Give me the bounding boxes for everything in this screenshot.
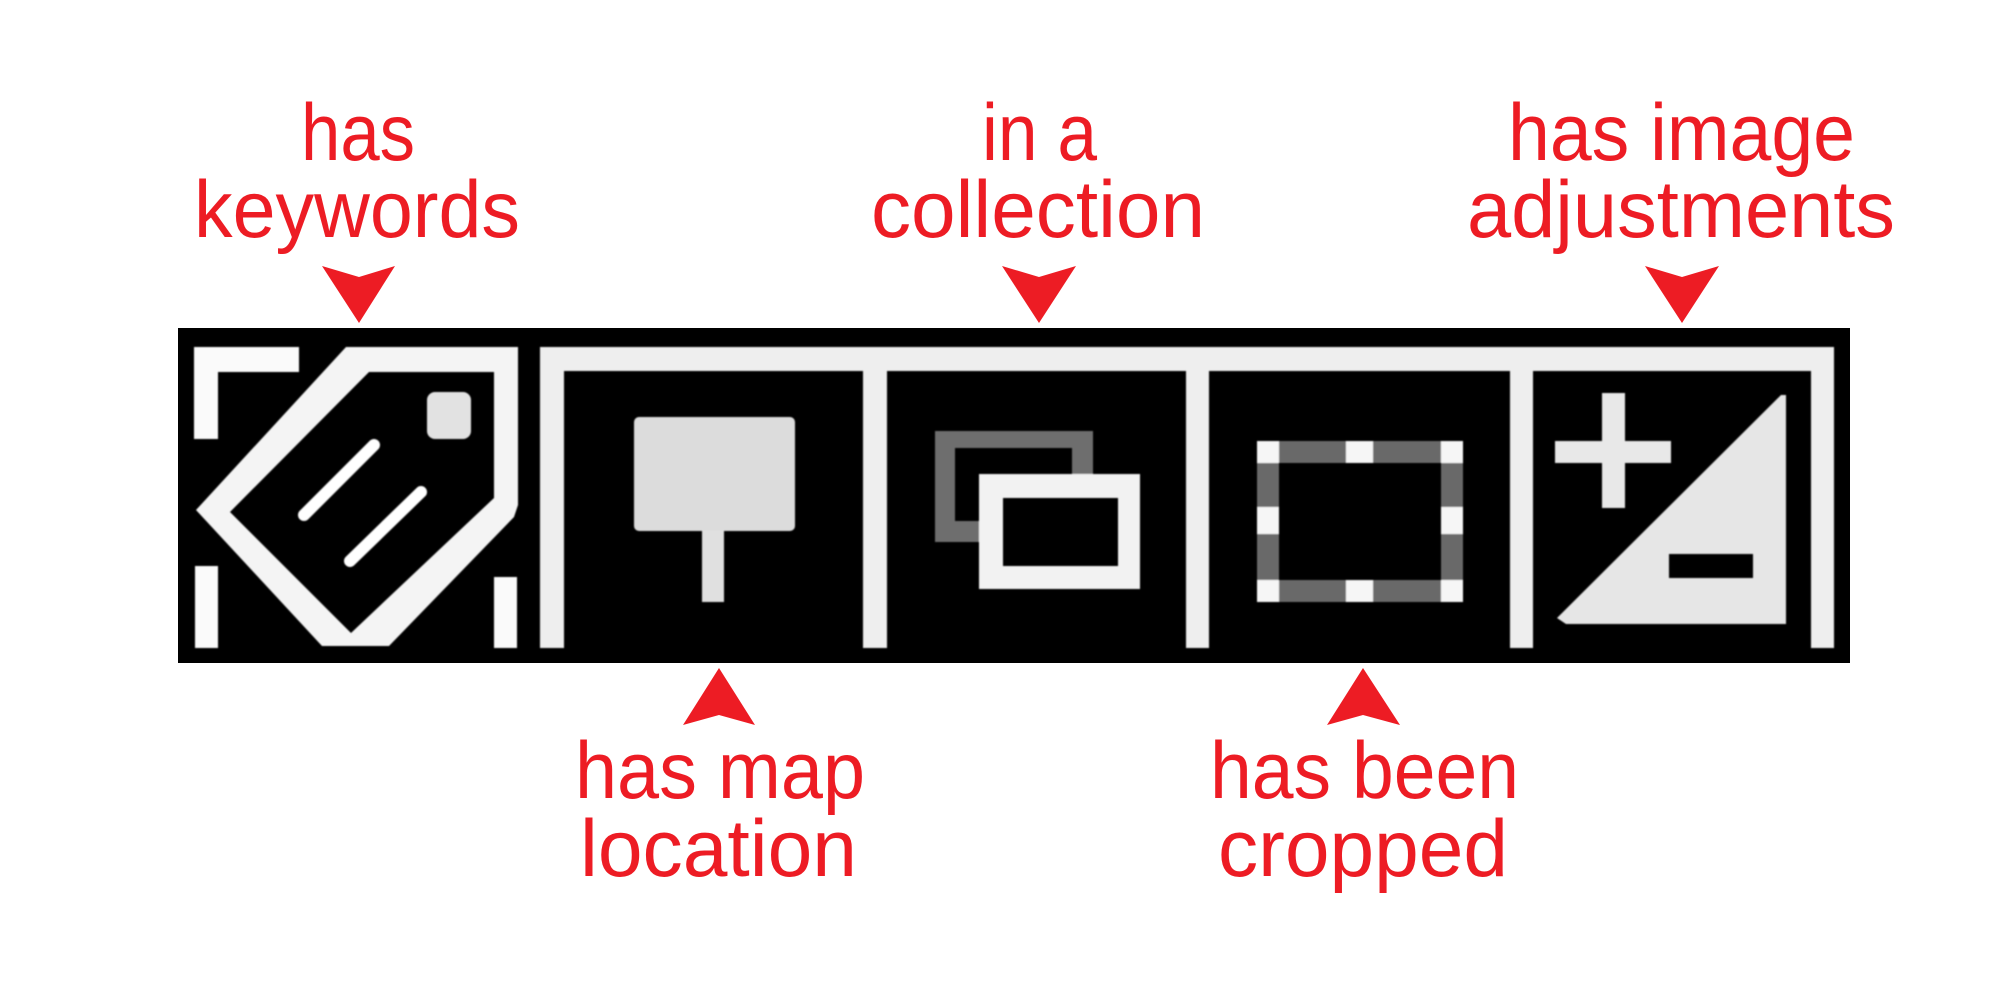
label: has been cropped	[1210, 726, 1519, 894]
arrow: cropped	[1327, 668, 1400, 725]
arrow: image adjustments	[1645, 266, 1719, 323]
label: in a collection: in a	[982, 88, 1098, 178]
label: has image adjustments: has image	[1508, 88, 1855, 178]
icon: keyword tag	[194, 347, 518, 648]
arrow: map location	[683, 668, 755, 725]
icon: crop	[1257, 441, 1463, 602]
icon tray frame	[540, 347, 1834, 648]
label: in a collection	[871, 88, 1205, 255]
label: has been cropped: has been	[1210, 726, 1519, 816]
icon: map location pin	[634, 417, 795, 602]
label: has map location: has map	[575, 726, 865, 816]
icon: image adjustments	[1555, 393, 1786, 624]
icon: collection	[935, 431, 1140, 589]
label: has map location: location	[580, 804, 857, 894]
black icon bar	[178, 328, 1850, 663]
label: has image adjustments: adjustments	[1467, 165, 1895, 255]
label: has keywords: keywords	[194, 165, 520, 255]
label: has been cropped: cropped	[1218, 804, 1508, 894]
arrow: collection	[1002, 266, 1076, 323]
label: has image adjustments	[1467, 88, 1895, 255]
arrow: keywords	[322, 266, 395, 323]
label: in a collection: collection	[871, 165, 1205, 255]
label: has keywords	[194, 88, 520, 255]
label: has map location	[575, 726, 865, 894]
label: has keywords: has	[301, 88, 415, 178]
